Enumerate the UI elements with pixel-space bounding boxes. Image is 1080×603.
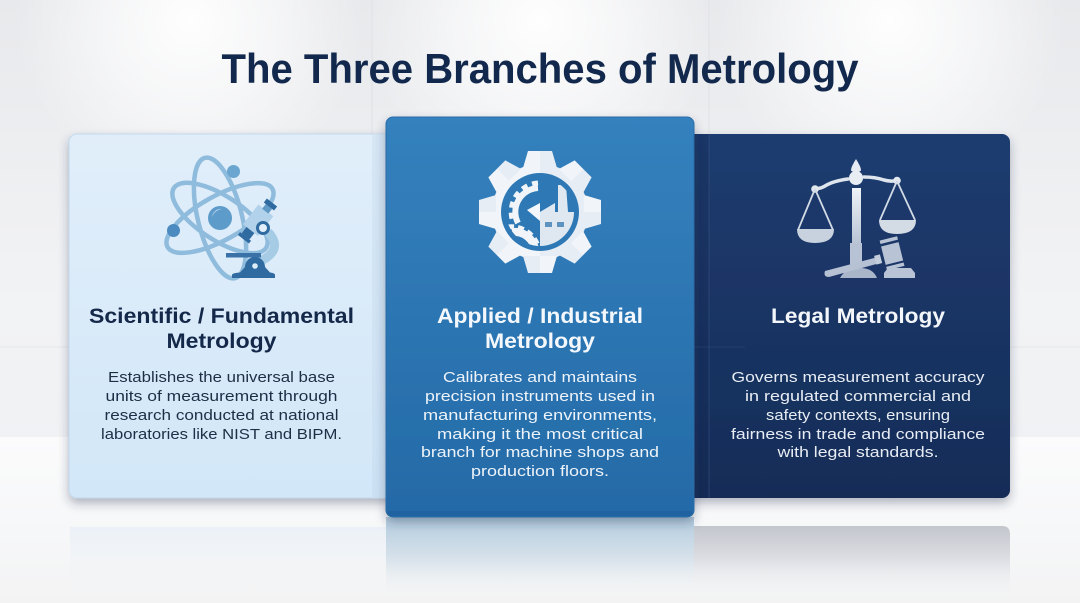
heading: Metrology [485, 330, 595, 353]
description: safety contexts, ensuring [766, 407, 950, 424]
description: Calibrates and maintains [443, 369, 637, 386]
card reflections on floor [70, 517, 1010, 599]
description: precision instruments used in [425, 388, 655, 405]
description: production floors. [471, 463, 609, 480]
heading: Legal Metrology [771, 305, 945, 328]
description: laboratories like NIST and BIPM. [101, 426, 342, 443]
panel: scientific metrology [69, 134, 399, 498]
heading [89, 305, 354, 353]
description: branch for machine shops and [421, 444, 659, 461]
description: research conducted at national [104, 407, 338, 424]
description [101, 369, 342, 443]
description: fairness in trade and compliance [731, 426, 985, 443]
panel: applied metrology [386, 117, 694, 517]
description: making it the most critical [437, 426, 643, 443]
description: units of measurement through [106, 388, 338, 405]
icon: atom and microscope [157, 153, 283, 283]
description: Governs measurement accuracy [732, 369, 985, 386]
description: Establishes the universal base [108, 369, 335, 386]
panel: legal metrology [680, 134, 1010, 498]
heading: Metrology [166, 330, 277, 353]
description: manufacturing environments, [423, 407, 657, 424]
title: The Three Branches of Metrology [222, 45, 859, 92]
description: in regulated commercial and [745, 388, 971, 405]
description: with legal standards. [776, 444, 938, 461]
description [731, 369, 985, 461]
heading [437, 305, 643, 353]
icon: gear with factory [479, 151, 601, 273]
icon: scales and gavel [797, 159, 916, 278]
description [421, 369, 659, 480]
heading: Applied / Industrial [437, 305, 643, 328]
heading: Scientific / Fundamental [89, 305, 354, 328]
